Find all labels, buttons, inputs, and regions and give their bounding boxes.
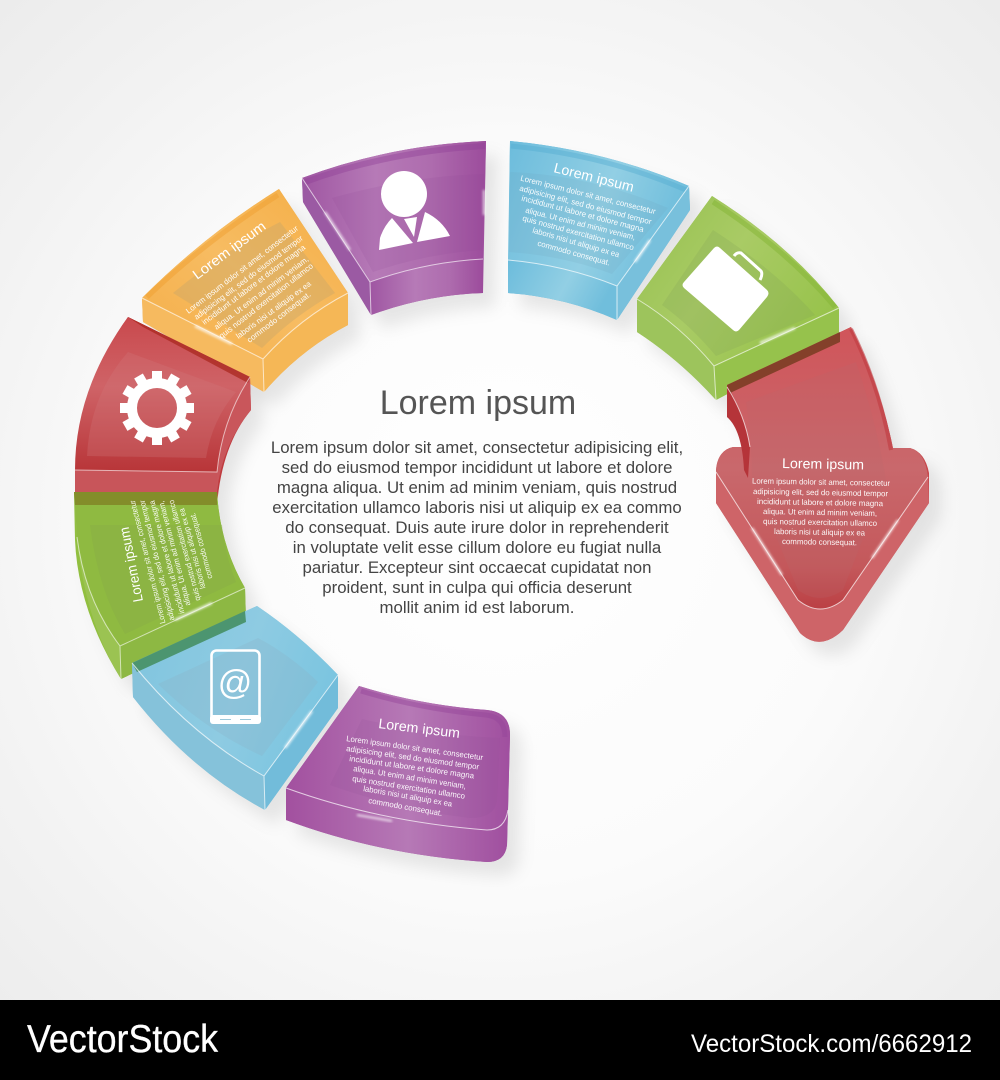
label: orange text: Lorem ipsum [189,218,269,282]
label: purple text: commodo consequat. [368,796,443,818]
label: orange text: aliqua. Ut enim ad minim veniam, [212,255,310,332]
segment: blue phone [132,606,338,810]
label: arrow text: Lorem ipsum [782,455,864,472]
segment: blue text top [508,141,690,320]
label: blue text: aliqua. Ut enim ad minim veniam, [525,206,636,242]
label: purple text: Lorem ipsum dolor sit amet, consectetur [346,734,484,762]
label: purple text: quis nostrud exercitation ullamco [352,774,466,801]
label: orange text: laboris nisi ut aliquip ex ea [234,279,313,341]
label: arrow text: adipisicing elit, sed do eiusmod tempor [753,487,888,498]
icon: gear [120,371,194,445]
label: blue text: quis nostrud exercitation ullamco [521,214,635,252]
label: arrow text: aliqua. Ut enim ad minim veniam, [763,507,877,518]
icon: person [379,171,450,250]
label: arrow text: laboris nisi ut aliquip ex ea [774,527,866,538]
label: arrow text: commodo consequat. [782,537,857,547]
label: blue text [518,159,657,267]
label: green text: adipisicing elit, sed do eiusmod tempor [138,499,176,622]
label: orange text: adipisicing elit, sed do eiusmod tempor [192,234,305,322]
center body text: sed do eiusmod tempor incididunt ut labore et dolore [282,458,672,477]
label: arrow text: quis nostrud exercitation ullamco [763,517,878,528]
label: blue text: laboris nisi ut aliquip ex ea [531,226,621,259]
label: purple text: adipisicing elit, sed do eiusmod tempor [346,744,480,772]
segment: purple text bottom [286,686,510,862]
label: green text: commodo consequat. [188,512,214,580]
label: green text: quis nostrud exercitation ullamco [167,499,202,602]
label: green text: incididunt ut labore et dolore magna [147,499,186,615]
label: purple text: Lorem ipsum [378,715,461,741]
segment: green briefcase [637,196,839,400]
icon: briefcase [682,246,768,332]
label: green text: Lorem ipsum [116,526,146,603]
icon: phone with at sign [210,650,261,724]
label: orange text: incididunt ut labore et dolore magna [200,243,308,327]
center body text: mollit anim id est laborum. [380,598,574,617]
label: green text [116,499,214,625]
segment: orange text [142,189,348,392]
label: purple text: aliqua. Ut enim ad minim veniam, [353,764,467,791]
arrow: red [716,327,929,642]
label: orange text: Lorem ipsum dolor sit amet, consectetur [184,224,300,316]
label: purple text: laboris nisi ut aliquip ex ea [363,784,453,809]
footer logo: VectorStock [27,1018,218,1061]
label: arrow text: Lorem ipsum dolor sit amet, consectetur [752,477,890,488]
center body text: exercitation ullamco laboris nisi ut aliquip ex ea commo [272,498,682,517]
center body text: Lorem ipsum dolor sit amet, consectetur adipisicing elit, [271,438,683,457]
label: green text: aliqua. Ut enim ad minim veniam, [157,500,192,607]
icon: phone with at sign: @ [218,664,252,702]
label: purple text [346,715,484,818]
label: green text: laboris nisi ut aliquip ex ea [177,507,207,590]
label: blue text: incididunt ut labore et dolore magna [520,194,645,234]
label: green text: Lorem ipsum dolor sit amet, consectetur [128,499,167,625]
segment: purple person [302,141,486,315]
center body text: magna aliqua. Ut enim ad minim veniam, quis nostrud [277,478,677,497]
center body text: in voluptate velit esse cillum dolore eu fugiat nulla [293,538,662,557]
segment: green text left [74,492,246,679]
segment: red gear [75,317,251,505]
label: blue text: commodo consequat. [536,239,611,267]
label: blue text: Lorem ipsum [552,159,636,195]
footer band [0,1000,1000,1080]
label: orange text [184,218,315,345]
label: orange text: quis nostrud exercitation ullamco [217,261,315,341]
label: purple text: incididunt ut labore et dolore magna [349,754,475,781]
center body text: proident, sunt in culpa qui officia deserunt [322,578,632,597]
label: orange text: commodo consequat. [245,290,313,345]
label: blue text: adipisicing elit, sed do eiusmod tempor [518,184,653,227]
center body text [271,438,683,617]
footer url: VectorStock.com/6662912 [691,1030,972,1058]
center heading: Lorem ipsum [380,384,576,422]
center body text: pariatur. Excepteur sint occaecat cupidatat non [303,558,651,577]
label: arrow text [752,455,890,547]
label: arrow text: incididunt ut labore et dolore magna [757,497,884,508]
center body text: do consequat. Duis aute irure dolor in reprehenderit [285,518,669,537]
label: blue text: Lorem ipsum dolor sit amet, consectetur [520,174,657,216]
